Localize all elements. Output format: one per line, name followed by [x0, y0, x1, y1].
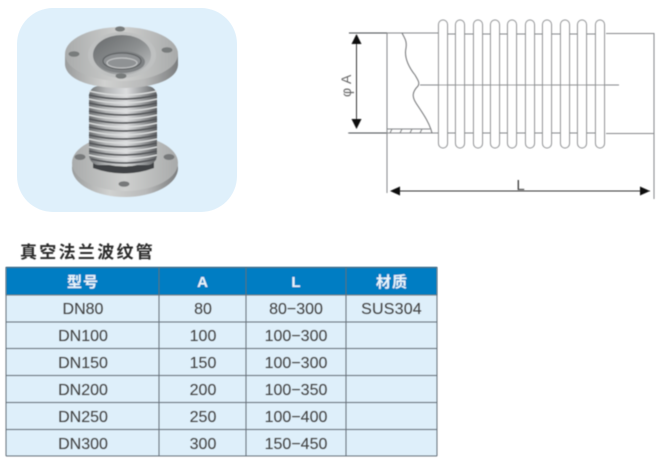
- top flange: [65, 26, 178, 88]
- row DN200: [58, 382, 327, 399]
- row DN100: [58, 328, 327, 345]
- row DN150: DN150: [58, 355, 108, 372]
- row DN80: [63, 301, 422, 318]
- table header row: A: [197, 274, 208, 291]
- row DN100: 100: [190, 328, 216, 345]
- row DN250: DN250: [58, 409, 108, 426]
- dimension: phi A: φ A: [338, 74, 354, 97]
- row DN300: DN300: [58, 436, 108, 453]
- table header row: [6, 267, 437, 295]
- pipe outline: [349, 33, 654, 199]
- center line: [420, 84, 619, 86]
- dimension: phi A: [338, 33, 387, 133]
- row DN200: 200: [190, 382, 216, 399]
- technical drawing: bellows cross-section: [349, 20, 654, 199]
- panel: product photo background: [17, 8, 237, 212]
- row DN150: [58, 355, 327, 372]
- dimension: L: [390, 177, 650, 196]
- row DN80: 80: [194, 301, 212, 318]
- hatched weld: [387, 129, 430, 133]
- row DN300: 150−450: [265, 436, 327, 453]
- row DN250: [58, 409, 327, 426]
- row DN200: 100−350: [265, 382, 327, 399]
- dimension: L: L: [516, 177, 525, 194]
- break line: [402, 33, 432, 133]
- title: 真空法兰波纹管: [20, 242, 155, 262]
- row DN100: DN100: [58, 328, 108, 345]
- row DN200: DN200: [58, 382, 108, 399]
- row DN150: 150: [190, 355, 216, 372]
- row DN80: DN80: [63, 301, 104, 318]
- row DN250: 250: [190, 409, 216, 426]
- row DN100: 100−300: [265, 328, 327, 345]
- bellows body: [89, 86, 157, 174]
- table header row: 材质: [376, 273, 408, 291]
- table body background: [6, 295, 437, 456]
- table header row: 型号: [67, 274, 99, 291]
- corrugation ribs: [438, 20, 604, 148]
- row DN80: SUS304: [361, 301, 422, 318]
- row DN80: 80−300: [269, 301, 323, 318]
- row DN300: [58, 436, 327, 453]
- table: specifications: [6, 267, 437, 456]
- table header row: L: [291, 274, 301, 291]
- row DN300: 300: [190, 436, 216, 453]
- table grid: [6, 267, 437, 456]
- row DN150: 100−300: [265, 355, 327, 372]
- icon: flanged bellows product: [65, 26, 178, 197]
- bottom flange: [72, 135, 178, 197]
- center line over ribs: [438, 84, 606, 86]
- row DN250: 100−400: [265, 409, 327, 426]
